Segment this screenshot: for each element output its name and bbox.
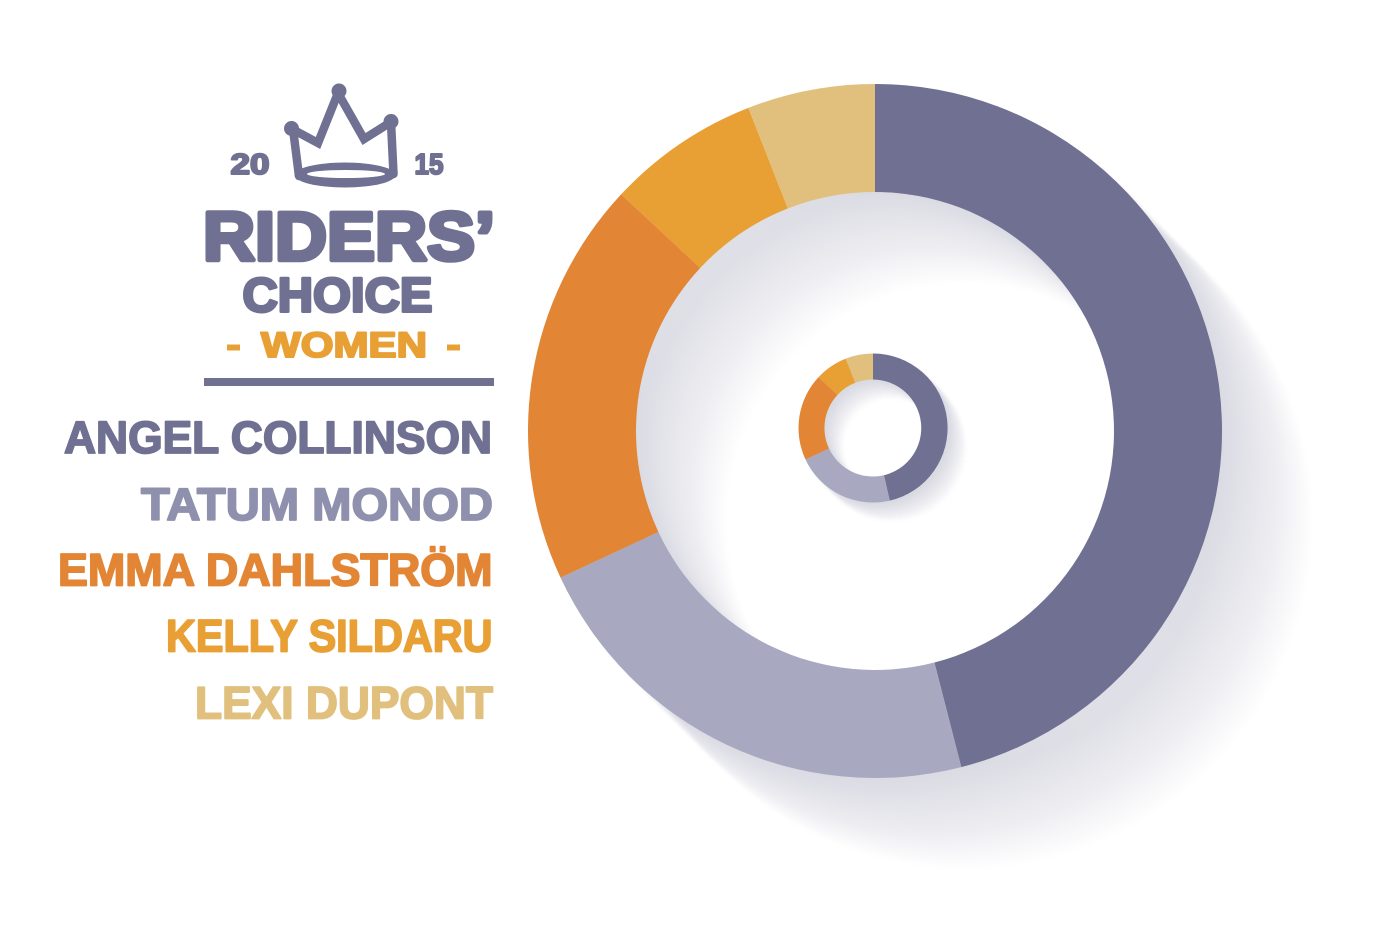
dash right — [447, 344, 460, 350]
name: Kelly Sildaru: KELLY SILDARU — [166, 610, 492, 662]
small segment: Kelly Sildaru — [818, 359, 855, 395]
name: Tatum Monod: TATUM MONOD — [141, 479, 493, 530]
crown ball top — [332, 84, 346, 98]
logo: crown and title — [203, 84, 495, 386]
small segment: Lexi Dupont — [846, 353, 873, 383]
crown points — [292, 93, 394, 176]
name: Angel Collinson: ANGEL COLLINSON — [64, 412, 492, 463]
crown ball left — [284, 121, 299, 136]
small segment: Angel Collinson — [873, 353, 948, 501]
year right: 15 — [414, 149, 444, 181]
segment: Tatum Monod — [560, 532, 961, 778]
name: Lexi Dupont: LEXI DUPONT — [195, 678, 493, 728]
legend: rider names — [58, 412, 493, 728]
crown base band — [294, 162, 396, 188]
long shadow of small ring — [813, 368, 954, 508]
donut chart: small centre ring — [799, 353, 948, 503]
divider rule — [204, 378, 494, 386]
small segment: Emma Dahlström — [799, 377, 838, 460]
small segment: Tatum Monod — [806, 448, 890, 503]
crown base opening — [307, 170, 385, 178]
donut chart: large ring — [528, 84, 1222, 778]
long shadow of large ring — [585, 141, 1258, 814]
year left: 20 — [230, 149, 270, 181]
heading: Riders': RIDERS’ — [203, 198, 495, 275]
icon: crown — [284, 84, 398, 188]
segment: Lexi Dupont — [748, 84, 875, 208]
dash left — [227, 344, 240, 350]
segment: Emma Dahlström — [528, 194, 700, 578]
segment: Angel Collinson — [875, 84, 1222, 767]
crown ball right — [384, 114, 398, 129]
heading: Choice: CHOICE — [242, 270, 432, 322]
heading: Women: WOMEN — [261, 326, 427, 365]
segment: Kelly Sildaru — [621, 108, 788, 268]
name: Emma Dahlström: EMMA DAHLSTRÖM — [58, 544, 492, 596]
